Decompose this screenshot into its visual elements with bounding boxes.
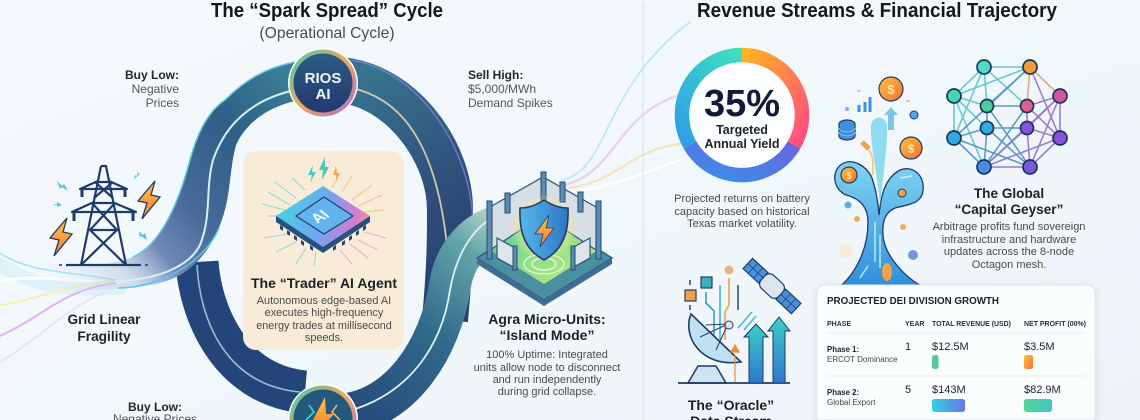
- label: buy low top: Buy Low:: [125, 68, 179, 82]
- panel: trader AI agent: [243, 151, 404, 350]
- text: yield description: capacity based on historical: [674, 206, 810, 218]
- icon: capital geyser: $: [846, 171, 852, 182]
- text: capital geyser description: updates across the 8-node: [944, 246, 1074, 258]
- icon: lightning bolt left: [50, 218, 72, 256]
- table row: phase 2: 5: [905, 384, 911, 396]
- label: sell high: $5,000/MWh: [468, 82, 536, 96]
- growth arrows: [744, 324, 768, 383]
- text: capital geyser description: [933, 221, 1085, 271]
- wall posts: [487, 172, 601, 270]
- table header row: [827, 321, 1086, 328]
- table row: phase 1: Phase 1:: [827, 345, 859, 354]
- table row: phase 2: Phase 2:: [827, 388, 859, 397]
- text: island mode description: 100% Uptime: Integrated: [486, 349, 608, 361]
- AI chip: AI: [307, 208, 334, 226]
- label: sell high: [468, 68, 553, 110]
- icon: capital geyser: [835, 77, 925, 288]
- accents: [862, 142, 869, 149]
- label: buy low top: Prices: [146, 96, 179, 110]
- dish: [689, 314, 741, 363]
- icon: oracle satellite dish and arrows: [678, 257, 802, 383]
- node: RIOS AI: AI: [316, 86, 330, 103]
- icon: capital geyser: $: [908, 142, 915, 156]
- icon: capital geyser: $: [887, 82, 895, 97]
- table row: phase 2: [827, 384, 1061, 412]
- label: grid linear fragility: Fragility: [77, 329, 131, 344]
- icon: shield bolt: [535, 215, 554, 247]
- data signal lines: [690, 278, 756, 345]
- table header row: YEAR: [905, 321, 924, 328]
- ring segment: upper right: [340, 60, 473, 320]
- band: right S curve into micro-units: [340, 214, 505, 415]
- label: grid linear fragility: Grid Linear: [67, 312, 141, 327]
- table row: phase 1: $3.5M: [1024, 341, 1055, 353]
- label: buy low bottom: [113, 400, 197, 420]
- text: trader description: [256, 295, 392, 344]
- text: yield description: Texas market volatility.: [687, 218, 797, 230]
- diagram: spark spread loop: [40, 48, 505, 420]
- right energy wisps: [562, 22, 690, 192]
- icon: Agra micro-unit island: [477, 172, 612, 306]
- table row: phase 1: [827, 341, 1055, 369]
- node: bottom lightning: [288, 384, 358, 420]
- table row: phase 1: $12.5M: [932, 341, 969, 353]
- icon: shield: [520, 200, 568, 260]
- text: trader description: executes high-frequency: [265, 307, 384, 319]
- heading: oracle data stream: The “Oracle”: [688, 397, 774, 413]
- chart: 35% yield donut: 35%: [704, 83, 780, 125]
- water body: [835, 162, 925, 288]
- node: RIOS AI: RIOS: [305, 70, 341, 87]
- chip circuit traces: [262, 176, 386, 266]
- heading: capital geyser: “Capital Geyser”: [955, 202, 1063, 217]
- ring segment: lower left: [197, 262, 305, 392]
- table row: phase 2: Global Export: [827, 398, 876, 407]
- label: grid linear fragility: [67, 312, 141, 344]
- subtitle: operational cycle: (Operational Cycle): [259, 25, 395, 42]
- table header row: NET PROFIT (00%): [1024, 321, 1086, 328]
- icon: power transmission tower: [59, 166, 148, 265]
- AI chip: [276, 186, 370, 253]
- heading: oracle data stream: [688, 397, 774, 420]
- icon: sparks above chip: [308, 157, 340, 183]
- text: island mode description: units allow node to disconnect: [474, 362, 620, 374]
- table row: phase 2: $143M: [932, 384, 966, 396]
- heading: Agra micro-units: “Island Mode”: [500, 327, 594, 343]
- icon: small sparks: [52, 170, 147, 240]
- band: left S curve from grid: [40, 62, 295, 290]
- label: buy low top: Negative: [132, 82, 179, 96]
- text: trader description: speeds.: [305, 332, 343, 344]
- title: spark spread cycle: The “Spark Spread” Cycle: [211, 0, 443, 22]
- heading: Agra micro-units: [488, 311, 606, 343]
- label: sell high: Sell High:: [468, 68, 523, 82]
- label: buy low bottom: Buy Low:: [128, 400, 182, 414]
- text: island mode description: [474, 349, 620, 398]
- chart: 35% yield donut: Targeted: [716, 123, 768, 137]
- label: buy low top: [125, 68, 179, 110]
- icon: lightning bolt right: [138, 181, 160, 219]
- text: capital geyser description: Arbitrage profits fund sovereign: [933, 221, 1085, 233]
- text: trader description: Autonomous edge-based AI: [257, 295, 391, 307]
- walls: [490, 177, 596, 268]
- node: RIOS AI: [288, 48, 358, 118]
- title: revenue streams: Revenue Streams & Financial Trajectory: [697, 0, 1058, 22]
- text: trader description: energy trades at millisecond: [256, 320, 392, 332]
- text: island mode description: during grid collapse.: [498, 386, 596, 398]
- coins: [879, 77, 903, 101]
- data stack: [839, 120, 855, 140]
- panel: projected growth table: [817, 285, 1095, 420]
- heading: trader AI agent: The “Trader” AI Agent: [251, 275, 397, 291]
- satellite: [742, 257, 802, 315]
- bars and arrow: [859, 97, 870, 112]
- text: capital geyser description: Octagon mesh.: [972, 259, 1046, 271]
- central spout: [871, 118, 887, 205]
- table heading: PROJECTED DEI DIVISION GROWTH: [827, 296, 999, 307]
- table row: phase 2: $82.9M: [1024, 384, 1061, 396]
- heading: Agra micro-units: Agra Micro-Units:: [488, 311, 606, 327]
- icon: octagon mesh network: [947, 60, 1067, 174]
- table header row: TOTAL REVENUE (USD): [932, 321, 1011, 328]
- chart: 35% yield donut: Annual Yield: [704, 137, 780, 151]
- chart: 35% yield donut: [682, 55, 802, 175]
- heading: capital geyser: [955, 186, 1063, 217]
- table header row: PHASE: [827, 321, 851, 328]
- table row: phase 1: 1: [905, 341, 911, 353]
- text: island mode description: and run independently: [493, 374, 602, 386]
- left energy wisps: [0, 250, 130, 365]
- table row: phase 1: ERCOT Dominance: [827, 355, 898, 364]
- text: yield description: [674, 193, 810, 230]
- heading: capital geyser: The Global: [974, 186, 1044, 201]
- text: capital geyser description: infrastructure and hardware: [942, 234, 1076, 246]
- label: sell high: Demand Spikes: [468, 96, 553, 110]
- text: yield description: Projected returns on battery: [674, 193, 810, 205]
